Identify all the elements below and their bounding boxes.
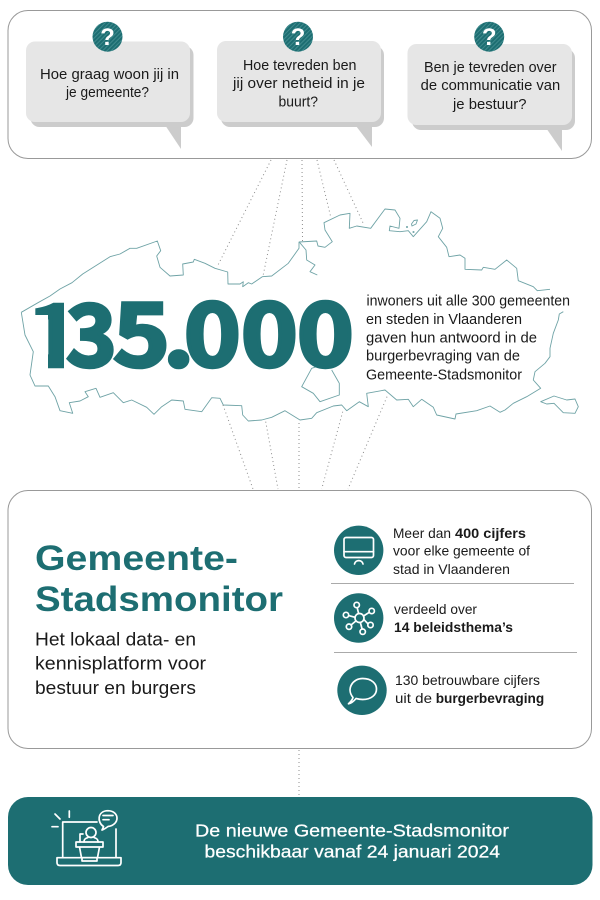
- big number: 1: [27, 268, 84, 392]
- icon: speech bubble: [337, 666, 387, 715]
- text: burgerbevraging: 130 betrouwbare cijfers: [395, 672, 540, 688]
- text block: respondents: en steden in Vlaanderen: [366, 312, 522, 328]
- dotted connectors from map to platform: [223, 397, 387, 796]
- banner text: [195, 821, 509, 862]
- text: 14 beleidsthema's: verdeeld over: [394, 601, 477, 617]
- question bubble 1: je gemeente?: [65, 85, 149, 101]
- dotted connectors from questions to map: [217, 160, 364, 276]
- icon: question mark 2: ?: [291, 24, 305, 51]
- icon: question mark 2: [283, 22, 313, 52]
- icon: question mark 3: [474, 22, 504, 52]
- text: burgerbevraging: uit de: [395, 690, 432, 706]
- text block: respondents: gaven hun antwoord in de: [366, 330, 537, 346]
- banner text: beschikbaar vanaf 24 januari 2024: [204, 842, 500, 862]
- text: 400 cijfers: [393, 525, 530, 577]
- heading: Stadsmonitor: [35, 580, 283, 619]
- icon: question mark 1: [92, 22, 122, 52]
- question bubble 2: [217, 41, 384, 147]
- banner text: De nieuwe Gemeente-Stadsmonitor: [195, 821, 509, 841]
- question bubble 3: de communicatie van: [421, 78, 560, 94]
- question bubble 3: [408, 44, 575, 151]
- big number: 5.000: [113, 268, 354, 392]
- question bubble 2: buurt?: [278, 94, 318, 110]
- text block: respondents: inwoners uit alle 300 gemeenten: [366, 294, 570, 310]
- icon: question mark 1: ?: [100, 24, 115, 51]
- question bubble 2: jij over netheid in je: [232, 76, 365, 92]
- text block: respondents: Gemeente-Stadsmonitor: [366, 367, 522, 383]
- question bubble 1: [26, 42, 194, 149]
- question bubble 2: Hoe tevreden ben: [243, 58, 356, 74]
- map: outline of Flanders: [21, 209, 578, 421]
- text: 400 cijfers: 400 cijfers: [455, 525, 526, 541]
- text: 14 beleidsthema's: 14 beleidsthema’s: [394, 619, 513, 635]
- text: 400 cijfers: Meer dan: [393, 525, 451, 541]
- question bubble 1: Hoe graag woon jij in: [40, 67, 179, 83]
- text block: respondents: [366, 294, 570, 383]
- heading: Gemeente-: [35, 539, 238, 578]
- banner: launch date: [8, 797, 592, 885]
- subheading: Het lokaal data- en: [35, 629, 196, 650]
- text: burgerbevraging: [395, 672, 544, 706]
- text: 14 beleidsthema's: [394, 601, 513, 635]
- icon: presenter at laptop: [52, 811, 121, 866]
- panel: Gemeente-Stadsmonitor platform: [8, 490, 592, 748]
- question bubble 3: Ben je tevreden over: [424, 60, 557, 76]
- text: burgerbevraging: burgerbevraging: [436, 690, 544, 706]
- panel: survey questions: [8, 10, 592, 158]
- text: 400 cijfers: voor elke gemeente of: [393, 543, 530, 559]
- big number: [35, 300, 352, 370]
- icon: monitor: [334, 526, 383, 575]
- text block: respondents: burgerbevraging van de: [366, 349, 520, 365]
- icon: network: [334, 593, 383, 643]
- subheading: kennisplatform voor: [35, 652, 206, 674]
- subheading: [35, 629, 206, 698]
- text: 400 cijfers: stad in Vlaanderen: [393, 561, 510, 577]
- big number: 3: [66, 266, 117, 392]
- icon: question mark 3: ?: [482, 24, 497, 51]
- heading: [35, 539, 283, 619]
- question bubble 3: je bestuur?: [452, 97, 526, 113]
- subheading: bestuur en burgers: [35, 677, 196, 698]
